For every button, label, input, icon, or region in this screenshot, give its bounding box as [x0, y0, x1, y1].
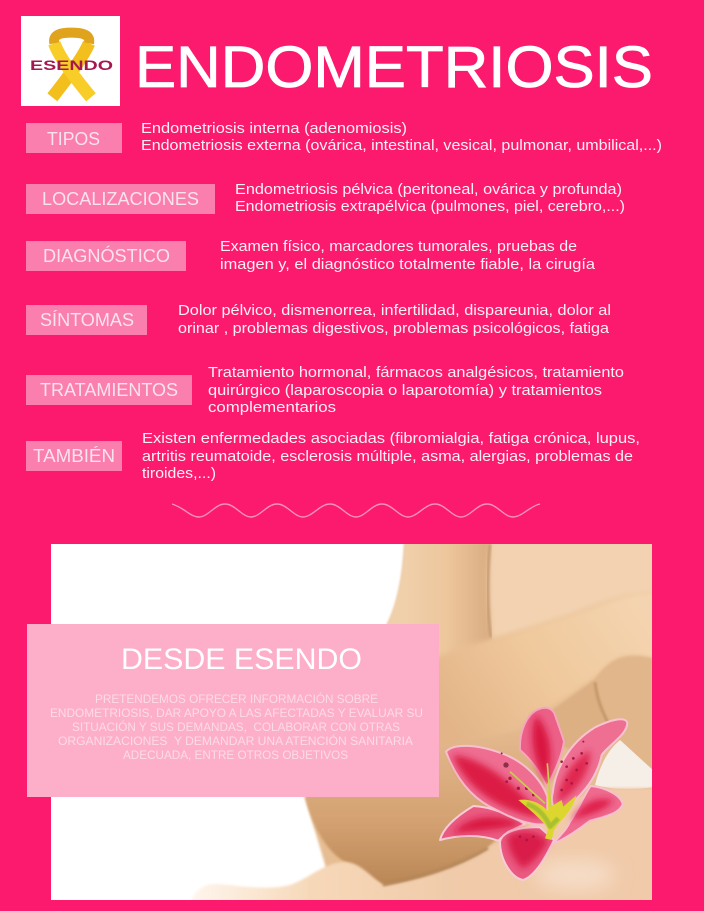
row: tipos — [26, 121, 662, 154]
icon: yellow ribbon — [52, 33, 91, 97]
text: sintomas: orinar , problemas digestivos, problemas psicológicos, fatiga — [178, 321, 610, 337]
text: mission: ORGANIZACIONES Y DEMANDAR UNA ATENCIÓN SANITARIA — [58, 735, 413, 748]
text: tratamientos: quirúrgico (laparoscopia o laparotomía) y tratamientos — [208, 383, 602, 399]
row: diagnostico — [26, 239, 596, 273]
text: localizaciones — [235, 182, 625, 215]
text: mission: PRETENDEMOS OFRECER INFORMACIÓN SOBRE — [95, 693, 378, 706]
petal: lower left — [440, 806, 525, 841]
row: tambien — [26, 431, 640, 482]
text: mission: SITUACIÓN Y SUS DEMANDAS, COLABORAR CON OTRAS — [72, 721, 400, 734]
label: tipos — [26, 123, 122, 153]
petal: left — [446, 746, 547, 825]
text: sintomas — [178, 303, 611, 337]
skin: lower left shadow — [305, 730, 560, 885]
row: localizaciones — [26, 182, 625, 215]
icon: lily flower — [440, 708, 627, 880]
logo: ESENDO ribbon: ESENDO — [30, 58, 113, 73]
text: mission: ENDOMETRIOSIS, DAR APOYO A LAS AFECTADAS Y EVALUAR SU — [50, 708, 423, 720]
text: diagnostico: Examen físico, marcadores tumorales, pruebas de — [220, 239, 577, 255]
label: tambien: TAMBIÉN — [33, 446, 115, 466]
skin: belly and thigh — [192, 786, 652, 900]
text: localizaciones: Endometriosis extrapélvica (pulmones, piel, cerebro,...) — [235, 199, 625, 215]
text: tambien — [142, 431, 640, 482]
skin: crease — [488, 544, 491, 638]
text: mission: ADECUADA, ENTRE OTROS OBJETIVOS — [123, 750, 348, 762]
label: sintomas: SÍNTOMAS — [40, 310, 134, 330]
text: tratamientos: complementarios — [208, 400, 336, 416]
label: localizaciones: LOCALIZACIONES — [42, 189, 199, 209]
text: sintomas: Dolor pélvico, dismenorrea, infertilidad, dispareunia, dolor al — [178, 303, 611, 319]
title: ENDOMETRIOSIS — [135, 35, 653, 100]
text: mission — [50, 693, 423, 762]
label: tipos: TIPOS — [47, 129, 100, 149]
skin: left column — [386, 544, 490, 655]
wavy divider — [172, 504, 540, 517]
logo: ESENDO ribbon — [21, 16, 120, 106]
skin: under arm right — [595, 655, 652, 682]
heading: desde esendo: DESDE ESENDO — [121, 643, 362, 676]
skin: shoulder — [486, 544, 652, 638]
petal: lower centre — [500, 827, 554, 880]
label: sintomas — [26, 305, 147, 335]
panel: desde esendo — [27, 624, 439, 797]
text: tipos: Endometriosis interna (adenomiosis) — [141, 121, 407, 137]
fabric: white — [595, 740, 655, 789]
skin: torso base — [304, 544, 652, 886]
petal: right — [552, 719, 627, 815]
photo: body with lily — [51, 530, 670, 911]
label: tambien — [26, 441, 122, 471]
text: tambien: artritis reumatoide, esclerosis múltiple, asma, alergias, problemas de — [142, 449, 633, 465]
petal spots — [501, 741, 588, 841]
row: sintomas — [26, 303, 611, 337]
label: localizaciones — [26, 184, 215, 214]
label: tratamientos: TRATAMIENTOS — [40, 380, 178, 400]
text: localizaciones: Endometriosis pélvica (peritoneal, ovárica y profunda) — [235, 182, 622, 198]
label: diagnostico — [26, 241, 186, 271]
text: tratamientos: Tratamiento hormonal, fármacos analgésicos, tratamiento — [208, 365, 624, 381]
skin: forearm — [439, 593, 652, 744]
petal: lower right — [553, 786, 623, 844]
row: tratamientos — [26, 365, 624, 416]
label: tratamientos — [26, 375, 192, 405]
text: tambien: tiroides,...) — [142, 466, 216, 482]
text: diagnostico — [220, 239, 596, 273]
text: tambien: Existen enfermedades asociadas (fibromialgia, fatiga crónica, lupus, — [142, 431, 640, 447]
text: tipos: Endometriosis externa (ovárica, intestinal, vesical, pulmonar, umbilical,...) — [141, 138, 662, 154]
text: tipos — [141, 121, 662, 154]
text: diagnostico: imagen y, el diagnóstico totalmente fiable, la cirugía — [220, 257, 596, 273]
petal: top — [520, 708, 564, 787]
flower centre — [510, 763, 577, 840]
text: tratamientos — [208, 365, 624, 416]
label: diagnostico: DIAGNÓSTICO — [43, 245, 170, 266]
